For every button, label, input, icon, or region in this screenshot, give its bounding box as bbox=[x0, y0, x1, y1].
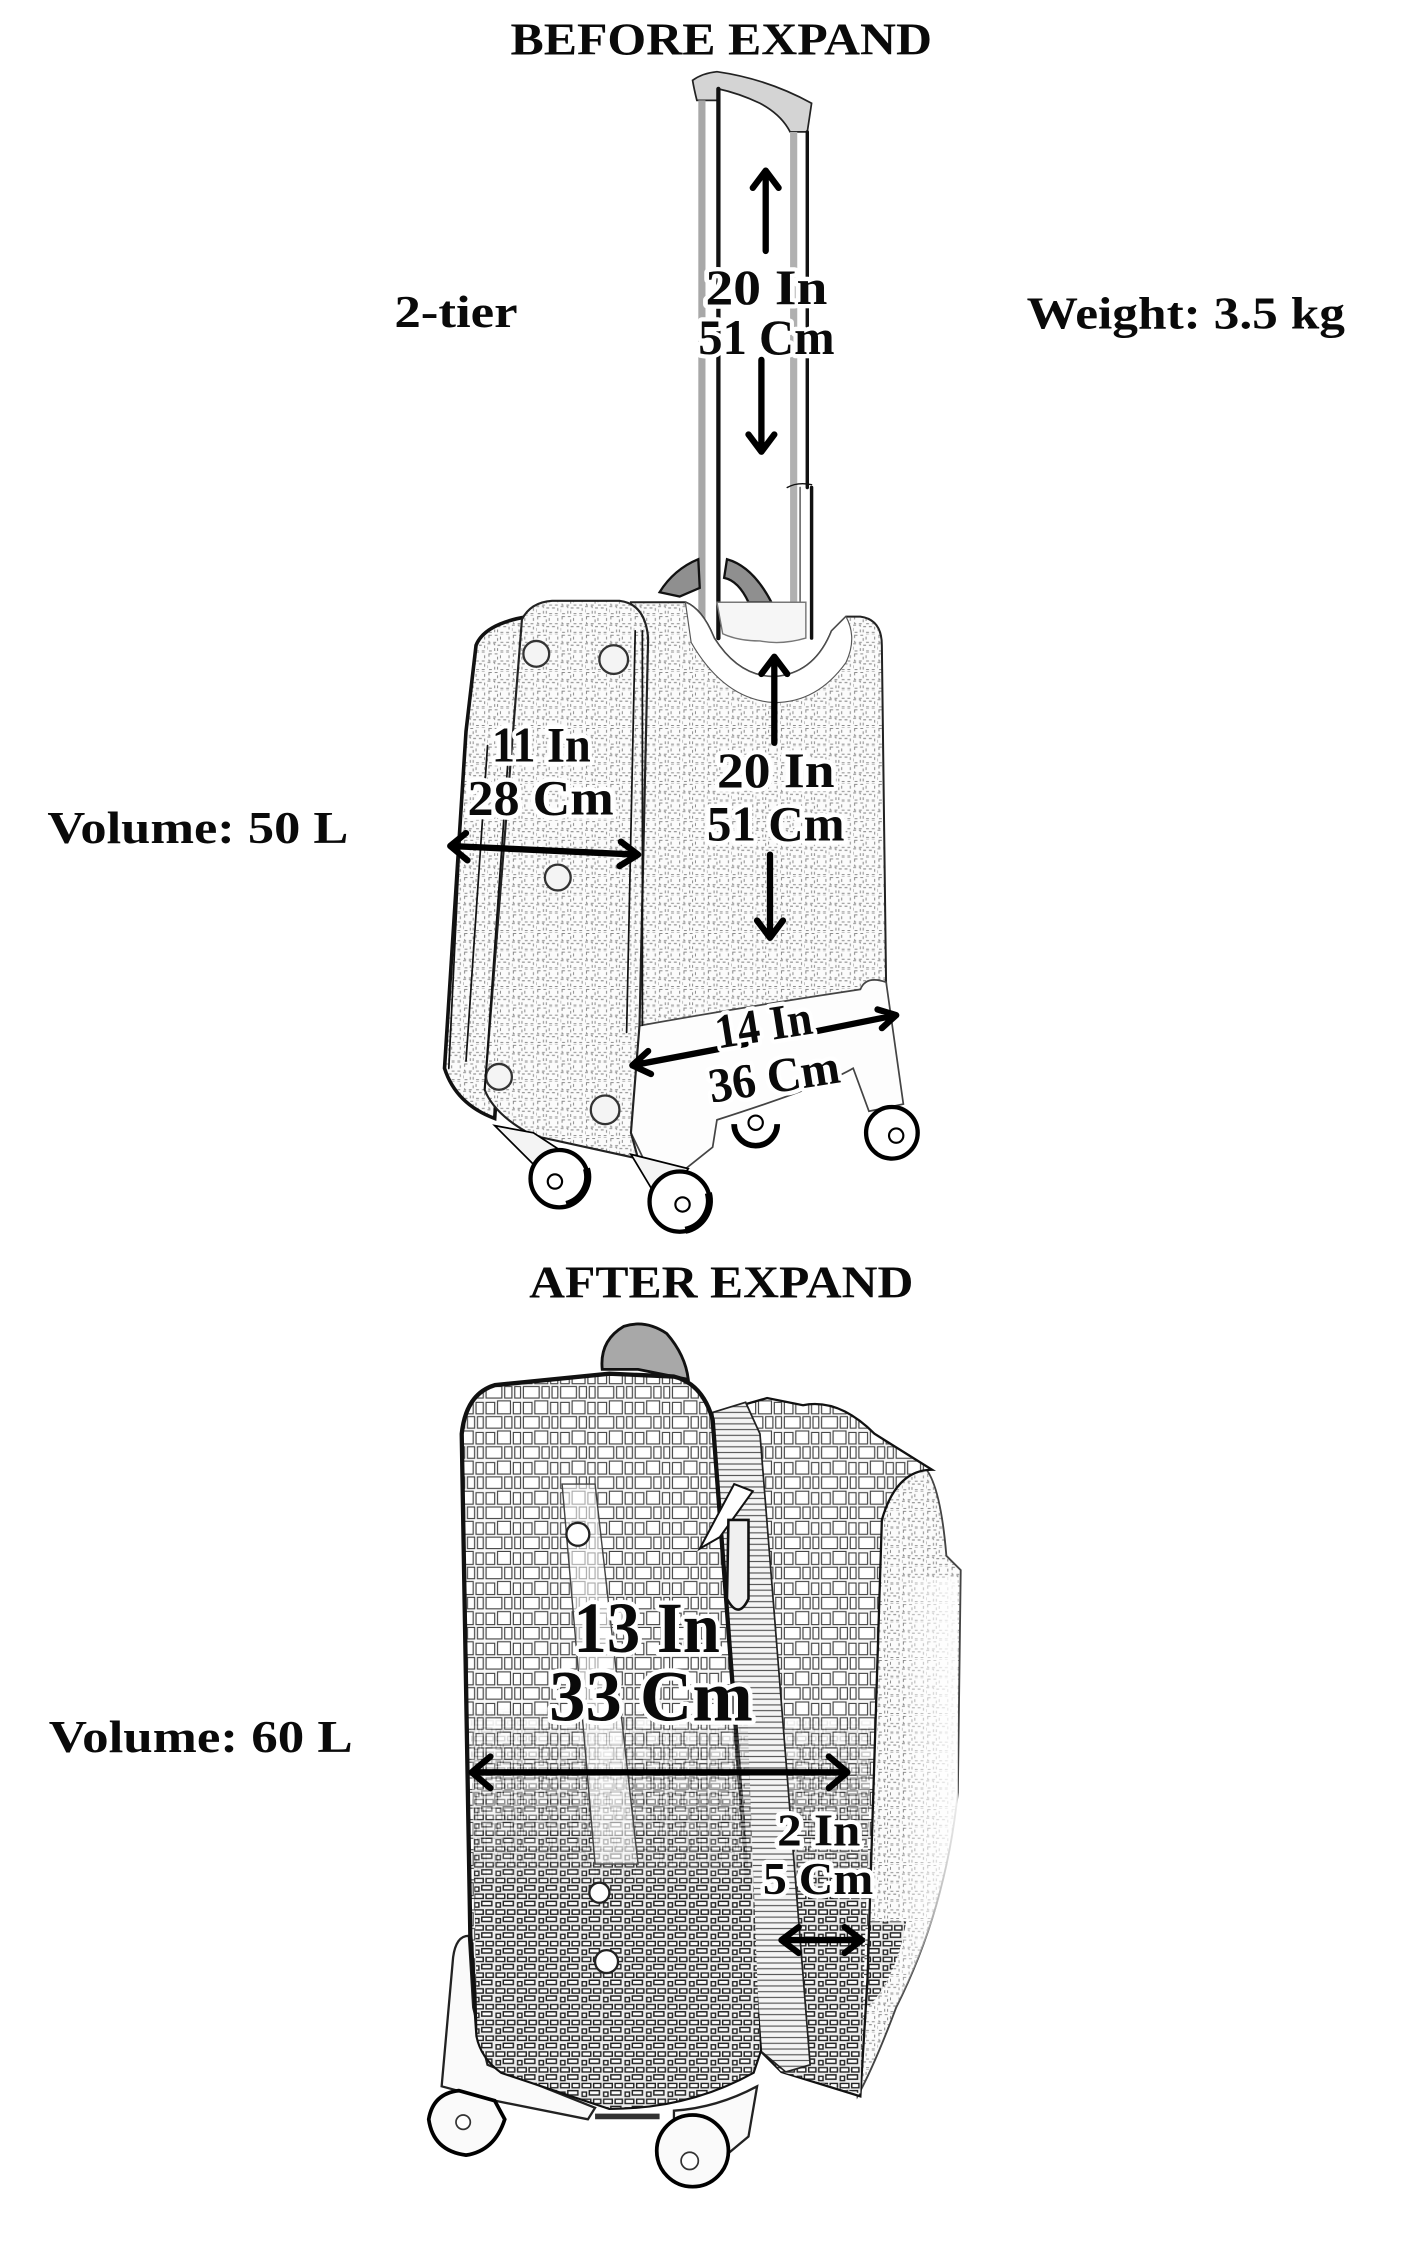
dimension: handle height: 51 Cm bbox=[698, 309, 835, 365]
dimension: expanded depth bbox=[472, 1588, 847, 1788]
rivets bbox=[566, 1523, 618, 1973]
zipper pull bbox=[700, 1484, 753, 1610]
main back panel bbox=[631, 602, 886, 1133]
strap bbox=[562, 1484, 638, 1864]
zipper band bbox=[713, 1402, 810, 2072]
illustration: suitcase after expand bbox=[429, 1324, 961, 2187]
dimension: width: 36 Cm bbox=[705, 1040, 843, 1114]
carry handle bbox=[660, 559, 771, 602]
dimension: handle height: 20 In bbox=[705, 259, 827, 315]
dimension: width: 14 In bbox=[711, 991, 816, 1059]
bottom casters and wheels bbox=[429, 2086, 757, 2187]
telescopic handle bbox=[693, 72, 812, 638]
heading: before expand: BEFORE EXPAND bbox=[510, 13, 932, 64]
dimension: expanded depth: 13 In bbox=[574, 1588, 720, 1668]
dimension: expansion depth: 2 In bbox=[777, 1804, 860, 1855]
label: 2-tier: 2-tier bbox=[394, 286, 518, 337]
side panel bbox=[485, 601, 648, 1159]
rear pouch body bbox=[846, 1463, 961, 2096]
main panel bbox=[462, 1374, 760, 2108]
wheels bbox=[495, 1107, 918, 1232]
dimension: expansion depth: 5 Cm bbox=[763, 1853, 873, 1904]
label: weight: Weight: 3.5 kg bbox=[1027, 287, 1345, 338]
dimension: handle height bbox=[698, 171, 835, 452]
heading: after expand: AFTER EXPAND bbox=[529, 1257, 913, 1308]
lower dense expansion bbox=[772, 1720, 872, 2094]
expansion section bbox=[717, 1398, 932, 2096]
recess for handle bbox=[717, 602, 806, 643]
notch rim bbox=[685, 602, 852, 703]
base moulding and rear casters bbox=[631, 980, 903, 1176]
seam lines bbox=[449, 631, 642, 1090]
dimension: body height: 51 Cm bbox=[707, 795, 845, 851]
dimension: width bbox=[632, 991, 896, 1114]
rear pouch bbox=[445, 617, 528, 1118]
label: volume after: Volume: 60 L bbox=[49, 1711, 353, 1762]
rivets bbox=[486, 641, 628, 1124]
dimension: body height: 20 In bbox=[717, 742, 835, 798]
dimension: expanded depth: 33 Cm bbox=[549, 1657, 753, 1737]
dimension: depth before: 11 In bbox=[492, 716, 591, 772]
label: volume before: Volume: 50 L bbox=[47, 802, 348, 853]
dimension: expansion depth bbox=[763, 1804, 873, 1953]
left caster bbox=[442, 1936, 595, 2119]
dimension: depth before bbox=[450, 716, 638, 866]
carry handle bbox=[602, 1324, 688, 1379]
pouch lower patch bbox=[860, 1921, 906, 2007]
lower dense panel bbox=[470, 1706, 760, 2108]
illustration: suitcase before expand bbox=[445, 72, 918, 1232]
dimension: body height bbox=[707, 657, 845, 938]
dimension: depth before: 28 Cm bbox=[467, 769, 614, 825]
